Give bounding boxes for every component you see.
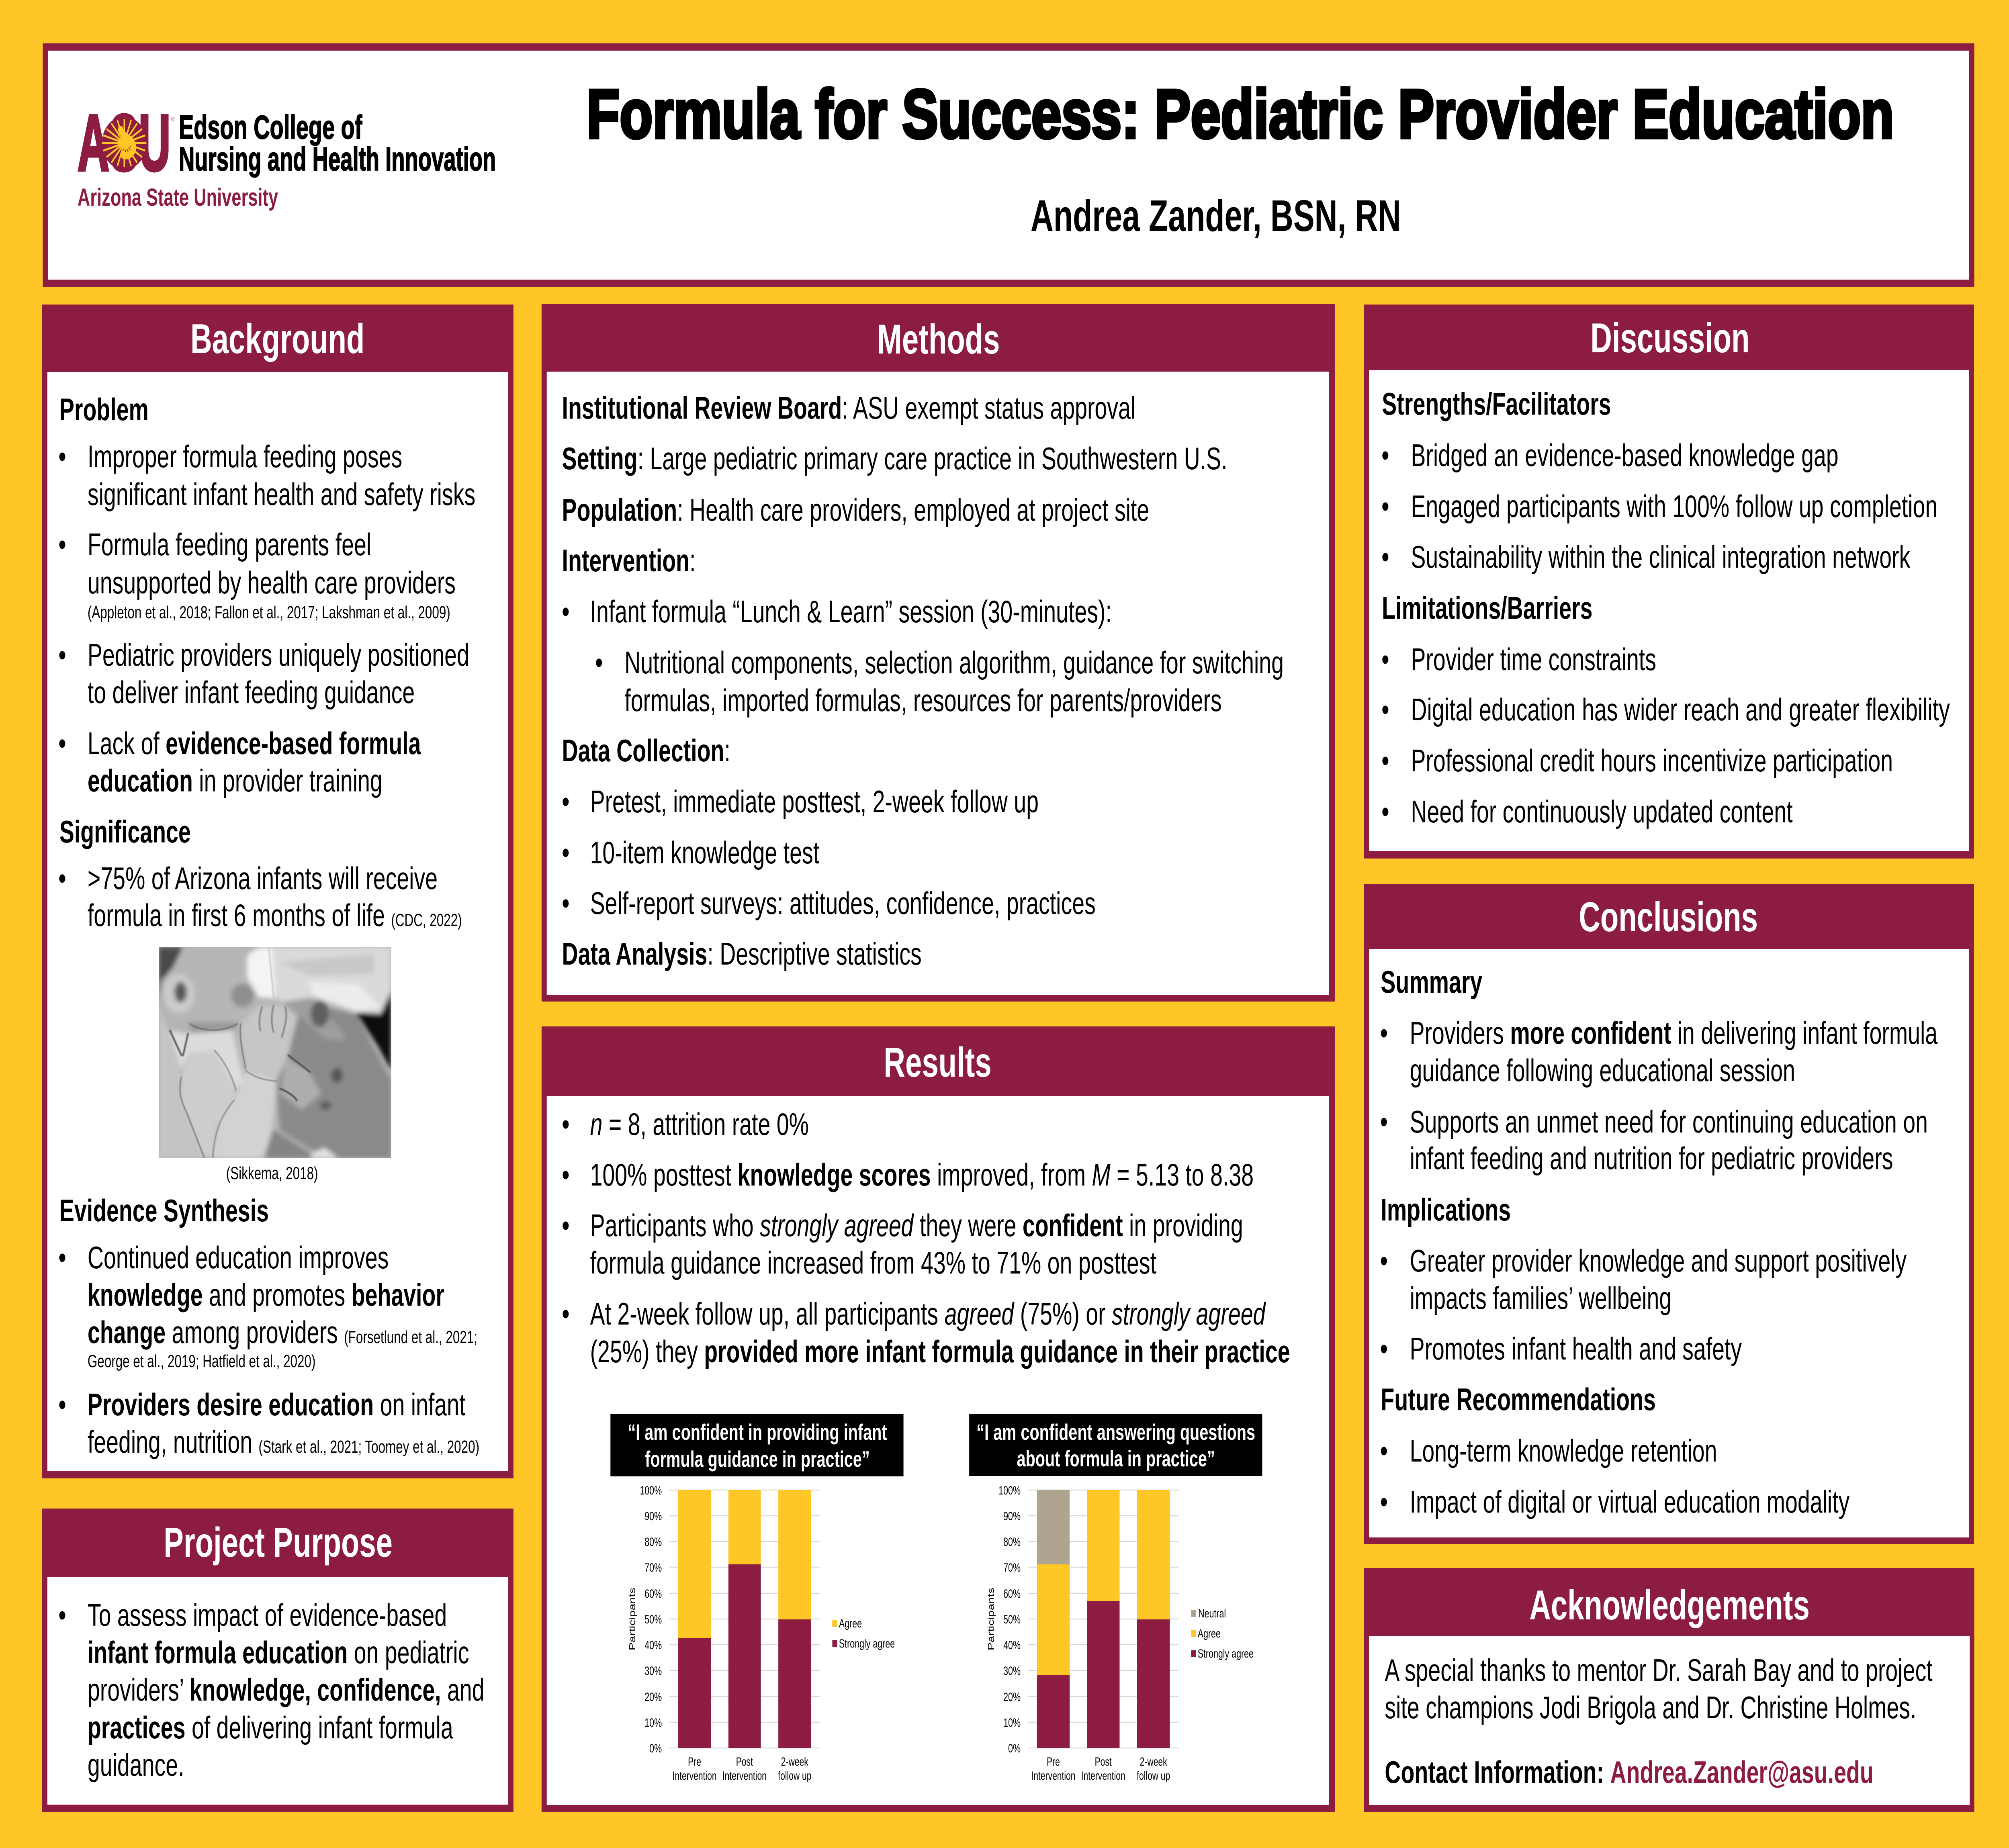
- bullet: sample size: •: [562, 1107, 570, 1142]
- bullet: lunch and learn: Infant formula “Lunch & Learn” session (30-minutes):: [590, 595, 1112, 629]
- bullet: providers positioned: •: [58, 638, 66, 673]
- legend: Agree: [839, 1616, 862, 1630]
- x axis labels: [673, 1756, 811, 1783]
- bullet: unmet need: •: [1380, 1105, 1388, 1139]
- bullet: more confident: guidance following educational session: [1410, 1053, 1795, 1088]
- logo: ASU Edson College: Arizona State University: [78, 184, 278, 211]
- bullet: knowledge test: 10-item knowledge test: [590, 836, 819, 870]
- text: contact information: Contact Information: Andrea.Zander@asu.edu: [1385, 1755, 1874, 1790]
- bullet: lack of education: education in provider training: [88, 764, 383, 798]
- bullet: providers desire education: [58, 1388, 479, 1460]
- chart title: formula guidance in practice”: [645, 1447, 870, 1472]
- y axis ticks: 30%: [1003, 1664, 1021, 1678]
- x axis labels: Post: [736, 1756, 753, 1768]
- panel: discussion: [1364, 305, 1974, 859]
- legend: Strongly agree: [839, 1636, 895, 1650]
- bullet: parents unsupported: [58, 527, 456, 622]
- x axis labels: Intervention: [1031, 1770, 1075, 1783]
- y axis ticks: 90%: [1003, 1509, 1021, 1523]
- bullet: parents unsupported: Formula feeding parents feel: [88, 527, 371, 562]
- sub-bullet: session content: •: [595, 646, 603, 680]
- subheading: summary: Summary: [1381, 965, 1483, 1000]
- y axis ticks: 10%: [644, 1715, 662, 1729]
- text: thanks: site champions Jodi Brigola and Dr. Christine Holmes.: [1385, 1691, 1916, 1725]
- bullet: continued education: [58, 1241, 477, 1371]
- bullet: knowledge gap: •: [1381, 438, 1389, 473]
- y axis ticks: 30%: [644, 1664, 662, 1678]
- logo: ASU Edson College: ASU: [78, 98, 170, 188]
- y axis ticks: 0%: [1008, 1741, 1021, 1755]
- bullet: parents unsupported: (Appleton et al., 2018; Fallon et al., 2017; Lakshman et al., 2009): [88, 603, 450, 622]
- bullet: lack of education: Lack of evidence-based formula: [88, 726, 421, 761]
- x axis labels: Intervention: [722, 1770, 767, 1783]
- panel: methods: [542, 304, 1335, 1002]
- heading: background: Background: [190, 316, 364, 362]
- bullet: pretest: •: [562, 785, 570, 819]
- y axis label: Participants: [627, 1588, 637, 1650]
- bullet: sustainability: Sustainability within the clinical integration network: [1411, 540, 1911, 574]
- bullet: providers desire education: feeding, nutrition (Stark et al., 2021; Toomey et al., 2020): [88, 1425, 479, 1460]
- y axis ticks: 40%: [644, 1638, 662, 1652]
- bullet: parents unsupported: •: [58, 527, 66, 562]
- bullet: families wellbeing: •: [1380, 1244, 1388, 1278]
- heading: methods: Methods: [877, 316, 1000, 363]
- bullet: improper feeding: [58, 440, 475, 512]
- subheading: implications: Implications: [1381, 1193, 1511, 1227]
- bullet: engaged participants: Engaged participants with 100% follow up completion: [1411, 489, 1937, 524]
- y axis ticks: 50%: [644, 1612, 662, 1626]
- bullet: continued education: •: [58, 1241, 66, 1275]
- sub-bullet: session content: Nutritional components, selection algorithm, guidance for switching: [624, 646, 1284, 680]
- heading: project purpose: Project Purpose: [164, 1519, 393, 1566]
- panel frame: [42, 1509, 514, 1812]
- heading: acknowledgements: Acknowledgements: [1529, 1582, 1810, 1629]
- bullet: health and safety: •: [1380, 1332, 1388, 1366]
- legend: Strongly agree: [1198, 1646, 1254, 1660]
- bullet: time constraints: •: [1381, 642, 1389, 677]
- text: thanks: [1385, 1653, 1933, 1725]
- bullet: continued education: Continued education improves: [88, 1241, 389, 1275]
- y axis ticks: 100%: [640, 1483, 662, 1497]
- y axis ticks: 90%: [644, 1509, 662, 1523]
- bullet: more confident: •: [1380, 1016, 1388, 1051]
- bullet: purpose statement: To assess impact of evidence-based: [88, 1598, 447, 1633]
- bullet: health and safety: Promotes infant health and safety: [1410, 1332, 1742, 1366]
- subheading: strengths: Strengths/Facilitators: [1382, 387, 1611, 421]
- y axis ticks: 20%: [1003, 1690, 1021, 1704]
- legend: Neutral: [1198, 1606, 1226, 1620]
- bullet: purpose statement: guidance.: [88, 1748, 184, 1783]
- subheading: data collection: Data Collection:: [562, 734, 730, 768]
- subheading: limitations: Limitations/Barriers: [1382, 591, 1592, 626]
- panel frame: [1364, 884, 1974, 1544]
- panel: background: [42, 305, 514, 1478]
- logo: ASU Edson College: Nursing and Health Innovation: [179, 141, 496, 178]
- logo: ASU Edson College: [78, 98, 496, 211]
- bullet: purpose statement: •: [58, 1598, 66, 1633]
- chart title: “I am confident in providing infant: [628, 1420, 887, 1445]
- bullet: digital education: •: [1381, 693, 1389, 727]
- bullet: improper feeding: significant infant health and safety risks: [88, 477, 475, 512]
- x axis labels: Intervention: [1081, 1770, 1125, 1783]
- y axis label: Participants: [986, 1588, 996, 1650]
- x axis labels: Pre: [688, 1756, 701, 1768]
- y axis ticks: 80%: [644, 1535, 662, 1549]
- text: thanks: A special thanks to mentor Dr. Sarah Bay and to project: [1385, 1653, 1933, 1688]
- panel frame: [42, 305, 514, 1478]
- bullet: sustainability: •: [1381, 540, 1389, 574]
- y axis ticks: [640, 1483, 662, 1755]
- heading: results: Results: [884, 1039, 992, 1086]
- bullet: 75 percent of infants: formula in first 6 months of life (CDC, 2022): [88, 898, 462, 933]
- bullet: 75 percent of infants: >75% of Arizona infants will receive: [88, 861, 438, 896]
- bullet: confidence: formula guidance increased from 43% to 71% on posttest: [590, 1246, 1156, 1280]
- sub-bullet: session content: formulas, imported formulas, resources for parents/providers: [624, 683, 1222, 718]
- sub-bullet: session content: [595, 646, 1284, 718]
- y axis ticks: 100%: [998, 1483, 1021, 1497]
- bullet: purpose statement: practices of delivering infant formula: [88, 1711, 453, 1745]
- bullet: purpose statement: infant formula education on pediatric: [88, 1635, 469, 1670]
- x axis labels: follow up: [1137, 1770, 1170, 1783]
- bars: [678, 1490, 811, 1748]
- bullet: retention: •: [1380, 1434, 1388, 1468]
- panel frame: [1364, 305, 1974, 859]
- x axis labels: [1031, 1756, 1170, 1783]
- bullet: confidence: [562, 1208, 1243, 1280]
- text: institutional review board: Institutional Review Board: ASU exempt status approval: [562, 391, 1135, 425]
- bullet: surveys: Self-report surveys: attitudes, confidence, practices: [590, 886, 1096, 921]
- legend: Agree: [1198, 1626, 1221, 1640]
- bullet: more confident: Providers more confident in delivering infant formula: [1410, 1016, 1938, 1051]
- legend: [1191, 1606, 1254, 1660]
- bullet: unmet need: infant feeding and nutrition for pediatric providers: [1410, 1141, 1893, 1176]
- bullet: providers desire education: •: [58, 1388, 66, 1422]
- x axis labels: Pre: [1047, 1756, 1060, 1768]
- bullet: 75 percent of infants: •: [58, 861, 66, 896]
- y axis ticks: 0%: [649, 1741, 662, 1755]
- bullet: follow up: [562, 1297, 1290, 1369]
- x axis labels: Intervention: [673, 1770, 717, 1783]
- chart: confident answering questions: [969, 1414, 1262, 1783]
- bullet: parents unsupported: unsupported by health care providers: [88, 566, 456, 600]
- bullet: engaged participants: •: [1381, 489, 1389, 524]
- chart title: [610, 1414, 904, 1476]
- subheading: significance: Significance: [59, 815, 191, 849]
- bullet: unmet need: Supports an unmet need for continuing education on: [1410, 1105, 1928, 1139]
- legend: [832, 1616, 895, 1650]
- bullet: 75 percent of infants: [58, 861, 462, 933]
- bullet: updated content: Need for continuously updated content: [1411, 795, 1793, 829]
- header banner: [43, 43, 1974, 287]
- bullet: modality: •: [1380, 1485, 1388, 1519]
- subheading: intervention: Intervention:: [562, 544, 696, 578]
- photo caption: (Sikkema, 2018): [226, 1163, 318, 1183]
- bullet: lunch and learn: •: [562, 595, 570, 629]
- bullet: unmet need: [1380, 1105, 1928, 1176]
- bullet: modality: Impact of digital or virtual education modality: [1410, 1485, 1850, 1519]
- y axis ticks: 10%: [1003, 1715, 1021, 1729]
- bullet: improper feeding: •: [58, 440, 66, 474]
- bullet: providers positioned: Pediatric providers uniquely positioned: [88, 638, 469, 673]
- x axis labels: follow up: [778, 1770, 811, 1783]
- subheading: future recommendations: Future Recommendations: [1381, 1382, 1656, 1417]
- logo: ASU Edson College: ®: [171, 115, 175, 123]
- x axis labels: Post: [1095, 1756, 1112, 1768]
- heading: conclusions: Conclusions: [1579, 894, 1758, 940]
- photo: baby being bottle fed: [159, 947, 391, 1158]
- bullet: retention: Long-term knowledge retention: [1410, 1434, 1717, 1468]
- panel frame: [542, 304, 1335, 1002]
- heading: discussion: Discussion: [1590, 315, 1750, 362]
- bullet: continued education: change among providers (Forsetlund et al., 2021;: [88, 1315, 477, 1350]
- panel frame: [1364, 1568, 1974, 1812]
- bullet: more confident: [1380, 1016, 1938, 1088]
- bullet: families wellbeing: [1380, 1244, 1907, 1316]
- bullet: knowledge scores: 100% posttest knowledge scores improved, from M = 5.13 to 8.38: [590, 1158, 1254, 1192]
- bullet: follow up: At 2-week follow up, all participants agreed (75%) or strongly agreed: [590, 1297, 1266, 1331]
- bullet: updated content: •: [1381, 795, 1389, 829]
- panel: project purpose: [42, 1509, 514, 1812]
- panel: conclusions: [1364, 884, 1974, 1544]
- y axis ticks: 80%: [1003, 1535, 1021, 1549]
- author: Andrea Zander, BSN, RN: [1031, 191, 1401, 241]
- title: Formula for Success: Pediatric Provider Education: [587, 76, 1894, 153]
- y axis ticks: 50%: [1003, 1612, 1021, 1626]
- bullet: knowledge test: •: [562, 836, 570, 870]
- y axis ticks: 20%: [644, 1690, 662, 1704]
- bullet: families wellbeing: impacts families’ wellbeing: [1410, 1281, 1671, 1316]
- panel: results: [542, 1026, 1335, 1812]
- text: setting: Setting: Large pediatric primary care practice in Southwestern U.S.: [562, 442, 1227, 476]
- bullet: knowledge scores: •: [562, 1158, 570, 1192]
- chart title: [969, 1414, 1262, 1476]
- bullet: families wellbeing: Greater provider knowledge and support positively: [1410, 1244, 1907, 1278]
- chart title: about formula in practice”: [1017, 1447, 1215, 1472]
- bullet: follow up: (25%) they provided more infant formula guidance in their practice: [590, 1335, 1290, 1369]
- text: data analysis: Data Analysis: Descriptive statistics: [562, 937, 922, 971]
- logo: ASU Edson College: Edson College of: [179, 109, 362, 146]
- bullet: confidence: Participants who strongly agreed they were confident in providing: [590, 1208, 1243, 1243]
- bullet: lack of education: •: [58, 726, 66, 761]
- bullet: confidence: •: [562, 1208, 570, 1243]
- x axis labels: 2-week: [781, 1756, 808, 1768]
- panel: acknowledgements: [1364, 1568, 1974, 1812]
- bars: [1037, 1490, 1170, 1748]
- bullet: credit hours: Professional credit hours incentivize participation: [1411, 744, 1893, 778]
- bullet: sample size: n = 8, attrition rate 0%: [590, 1107, 809, 1142]
- subheading: evidence synthesis: Evidence Synthesis: [59, 1194, 269, 1228]
- bullet: continued education: George et al., 2019; Hatfield et al., 2020): [88, 1351, 315, 1371]
- bullet: knowledge gap: Bridged an evidence-based knowledge gap: [1411, 438, 1839, 473]
- chart title: “I am confident answering questions: [976, 1420, 1255, 1445]
- bullet: providers positioned: [58, 638, 469, 710]
- y axis ticks: 70%: [644, 1560, 662, 1574]
- bullet: providers positioned: to deliver infant feeding guidance: [88, 675, 415, 710]
- bullet: continued education: knowledge and promotes behavior: [88, 1278, 444, 1312]
- chart: confident providing guidance: [610, 1414, 904, 1783]
- y axis ticks: 70%: [1003, 1560, 1021, 1574]
- bullet: follow up: •: [562, 1297, 570, 1331]
- text: population: Population: Health care providers, employed at project site: [562, 493, 1149, 527]
- bullet: providers desire education: Providers desire education on infant: [88, 1388, 466, 1422]
- bullet: surveys: •: [562, 886, 570, 921]
- y axis ticks: 60%: [644, 1586, 662, 1601]
- y axis ticks: [998, 1483, 1021, 1755]
- panel frame: [542, 1026, 1335, 1812]
- subheading: problem: Problem: [59, 392, 149, 427]
- bullet: purpose statement: providers’ knowledge, confidence, and: [88, 1673, 485, 1707]
- bullet: lack of education: [58, 726, 421, 798]
- bullet: digital education: Digital education has wider reach and greater flexibility: [1411, 693, 1950, 727]
- bullet: credit hours: •: [1381, 744, 1389, 778]
- bullet: purpose statement: [58, 1598, 485, 1783]
- y axis ticks: 60%: [1003, 1586, 1021, 1601]
- bullet: pretest: Pretest, immediate posttest, 2-week follow up: [590, 785, 1039, 819]
- bullet: time constraints: Provider time constraints: [1411, 642, 1656, 677]
- x axis labels: 2-week: [1140, 1756, 1167, 1768]
- bullet: improper feeding: Improper formula feeding poses: [88, 440, 402, 474]
- y axis ticks: 40%: [1003, 1638, 1021, 1652]
